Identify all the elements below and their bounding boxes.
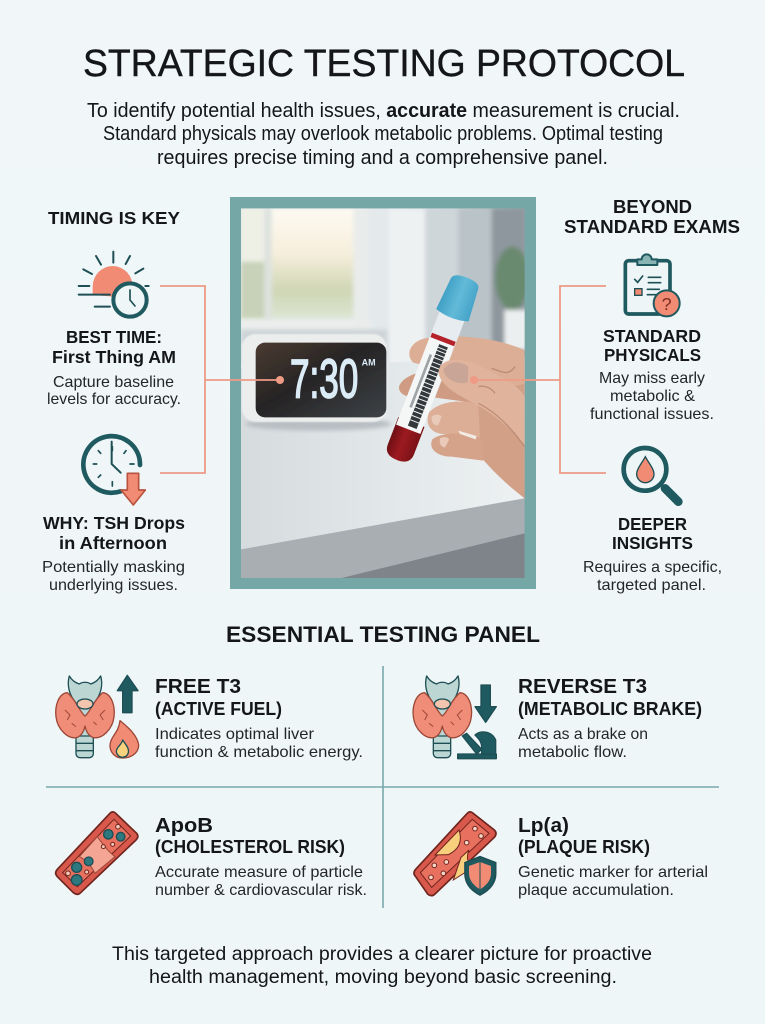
- text: free t3: (ACTIVE FUEL): [155, 699, 282, 719]
- text: free t3: [155, 675, 363, 761]
- text: lp(a): Genetic marker for arterial: [518, 864, 708, 881]
- text: lp(a): Lp(a): [518, 814, 569, 837]
- desk: [241, 357, 525, 578]
- intro text: Standard physicals may overlook metabolic problems. Optimal testing: [103, 123, 663, 145]
- footer text: health management, moving beyond basic screening.: [149, 967, 617, 988]
- panel: reverse t3: [413, 675, 702, 761]
- panel: timing is key: [42, 208, 185, 594]
- panel: lp(a): [414, 812, 708, 899]
- text: standard physicals: May miss early: [599, 370, 705, 387]
- text: reverse t3: metabolic flow.: [518, 744, 627, 761]
- inner frame edge: [236, 202, 530, 584]
- title: STRATEGIC TESTING PROTOCOL: [83, 43, 685, 85]
- text: why tsh drops: WHY: TSH Drops: [43, 513, 185, 533]
- heading: timing is key: TIMING IS KEY: [48, 208, 180, 228]
- text: reverse t3: (METABOLIC BRAKE): [518, 699, 702, 719]
- text: free t3: function & metabolic energy.: [155, 744, 363, 761]
- text: best time: Capture baseline: [53, 374, 174, 391]
- icon: clipboard with question mark: [625, 254, 680, 316]
- text: free t3: Indicates optimal liver: [155, 726, 315, 743]
- heading: beyond standard exams: STANDARD EXAMS: [564, 217, 740, 237]
- text: apob: Accurate measure of particle: [155, 864, 363, 881]
- text: deeper insights: [583, 514, 722, 594]
- text: lp(a): plaque accumulation.: [518, 882, 674, 899]
- intro text: To identify potential health issues, accurate measurement is crucial.: [87, 100, 680, 122]
- text: standard physicals: functional issues.: [590, 406, 714, 423]
- footer text: This targeted approach provides a clearer picture for proactive: [112, 944, 652, 965]
- heading: beyond standard exams: [564, 197, 740, 237]
- text: why tsh drops: Potentially masking: [42, 559, 185, 576]
- text: why tsh drops: in Afternoon: [59, 533, 167, 553]
- photo frame: clock and blood tube: [230, 197, 536, 589]
- text: best time: First Thing AM: [52, 347, 176, 367]
- text: apob: number & cardiovascular risk.: [155, 882, 367, 899]
- text: best time: [47, 327, 181, 408]
- icon: thyroid with up arrow and flame: [56, 675, 139, 758]
- intro text: requires precise timing and a comprehensive panel.: [157, 147, 608, 169]
- icon: artery with cholesterol particles: [56, 812, 138, 894]
- text: lp(a): (PLAQUE RISK): [518, 837, 650, 857]
- text: standard physicals: [590, 326, 714, 423]
- icon: magnifier with blood drop: [624, 448, 678, 502]
- blood tube: [386, 275, 478, 462]
- text: apob: [155, 814, 367, 899]
- connector: left bracket: [160, 286, 284, 473]
- footer text: [112, 944, 652, 988]
- text: reverse t3: Acts as a brake on: [518, 726, 648, 743]
- text: standard physicals: metabolic &: [610, 388, 695, 405]
- text: reverse t3: REVERSE T3: [518, 675, 647, 698]
- panel: beyond standard exams: [564, 197, 740, 594]
- text: best time: BEST TIME:: [66, 327, 162, 347]
- alarm clock: [242, 334, 387, 422]
- heading: beyond standard exams: BEYOND: [613, 197, 692, 217]
- alarm clock: 7:30: [290, 347, 358, 409]
- icon: clock with down arrow: [83, 436, 145, 505]
- intro text: [87, 100, 680, 169]
- icon: thyroid with down arrow and brake pedal: [413, 676, 496, 759]
- icon: artery with plaque and shield: [414, 812, 496, 896]
- text: why tsh drops: underlying issues.: [49, 577, 178, 594]
- connector: right bracket: [470, 286, 606, 473]
- text: deeper insights: Requires a specific,: [583, 559, 722, 576]
- panel: free t3: [56, 675, 363, 761]
- alarm clock: AM: [362, 357, 376, 367]
- text: standard physicals: PHYSICALS: [604, 345, 701, 365]
- text: apob: ApoB: [155, 814, 213, 837]
- text: deeper insights: targeted panel.: [597, 577, 706, 594]
- text: apob: (CHOLESTEROL RISK): [155, 837, 345, 857]
- text: best time: levels for accuracy.: [47, 391, 181, 408]
- hand behind tube: [399, 336, 525, 403]
- heading: essential testing panel: ESSENTIAL TESTING PANEL: [226, 622, 540, 647]
- text: standard physicals: STANDARD: [603, 326, 701, 346]
- text: lp(a): [518, 814, 708, 899]
- text: deeper insights: INSIGHTS: [612, 533, 693, 553]
- icon: sun and clock: [79, 252, 149, 317]
- icon: clipboard with question mark: ?: [662, 294, 672, 314]
- text: deeper insights: DEEPER: [618, 514, 687, 534]
- text: why tsh drops: [42, 513, 185, 594]
- text: reverse t3: [518, 675, 702, 761]
- text: free t3: FREE T3: [155, 675, 241, 698]
- hand in front: [428, 360, 525, 498]
- panel: apob: [56, 812, 367, 899]
